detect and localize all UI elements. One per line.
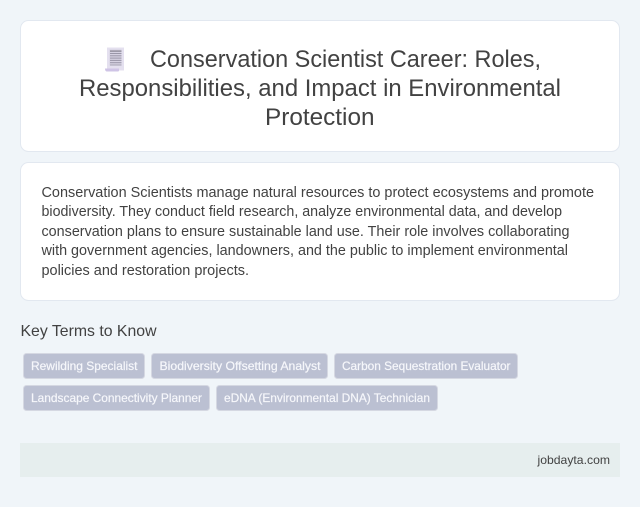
description text: policies and restoration projects. [42,263,249,279]
title: Protection [265,104,374,131]
panel: description card [20,162,620,300]
icon: document scroll [105,48,124,72]
panel: title card [20,20,620,152]
footer: site name: jobdayta.com [536,453,610,467]
tag: eDNA (Environmental DNA) Technician: eDNA (Environmental DNA) Technician [224,391,430,405]
tag: Landscape Connectivity Planner [24,386,210,410]
description text: conservation plans to ensure sustainable land use. Their role involves collaborating [42,224,570,240]
description text [40,185,594,279]
tag: Rewilding Specialist [24,354,144,378]
tag: Rewilding Specialist: Rewilding Specialist [31,359,138,373]
heading: key terms: Key Terms to Know [20,323,157,340]
title [79,46,561,131]
tag: eDNA (Environmental DNA) Technician [216,386,438,410]
description text: Conservation Scientists manage natural resources to protect ecosystems and promote [42,185,594,201]
title: Responsibilities, and Impact in Environmental [79,75,561,102]
description text: biodiversity. They conduct field research, analyze environmental data, and develop [42,204,562,220]
title: Conservation Scientist Career: Roles, [150,46,541,73]
tag: Carbon Sequestration Evaluator [334,354,518,378]
tag: Landscape Connectivity Planner: Landscape Connectivity Planner [31,391,202,405]
tag: Biodiversity Offsetting Analyst: Biodiversity Offsetting Analyst [160,359,321,373]
footer bar [20,443,620,477]
tag: Biodiversity Offsetting Analyst [152,354,328,378]
tag: Carbon Sequestration Evaluator: Carbon Sequestration Evaluator [342,359,510,373]
description text: with government agencies, landowners, and the public to implement environmental [40,243,568,259]
